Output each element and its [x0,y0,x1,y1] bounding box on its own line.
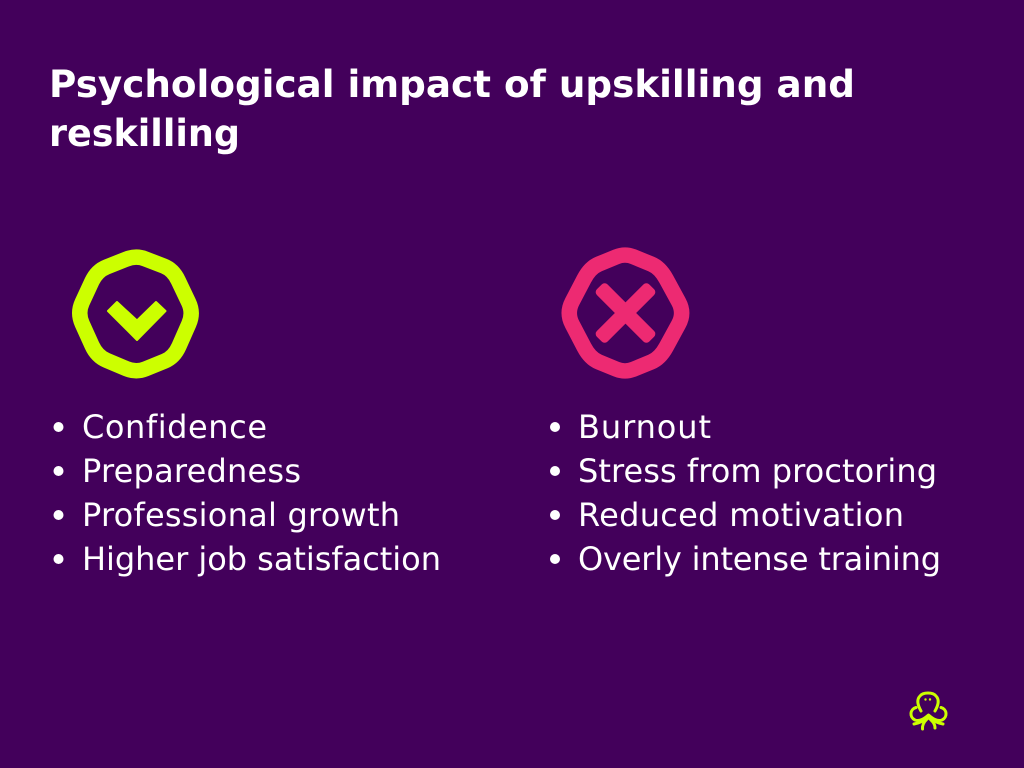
list: negative impacts: Overly intense training [578,540,941,578]
list: negative impacts: Reduced motivation [578,496,904,534]
list: negative impacts: Burnout [578,408,711,446]
title [49,63,855,155]
list: positive impacts: Confidence [82,408,267,446]
list: positive impacts: Professional growth [82,496,400,534]
list: positive impacts [54,408,441,578]
title: Psychological impact of upskilling and [49,63,855,106]
list: negative impacts: Stress from proctoring [578,452,937,490]
list: negative impacts [550,408,941,578]
icon: lime check in octagon [80,257,191,371]
icon: octopus logo [911,693,946,729]
icon: pink cross in octagon [569,255,682,371]
list: positive impacts: Higher job satisfaction [82,540,441,578]
title: reskilling [49,112,240,155]
list: positive impacts: Preparedness [82,452,301,490]
